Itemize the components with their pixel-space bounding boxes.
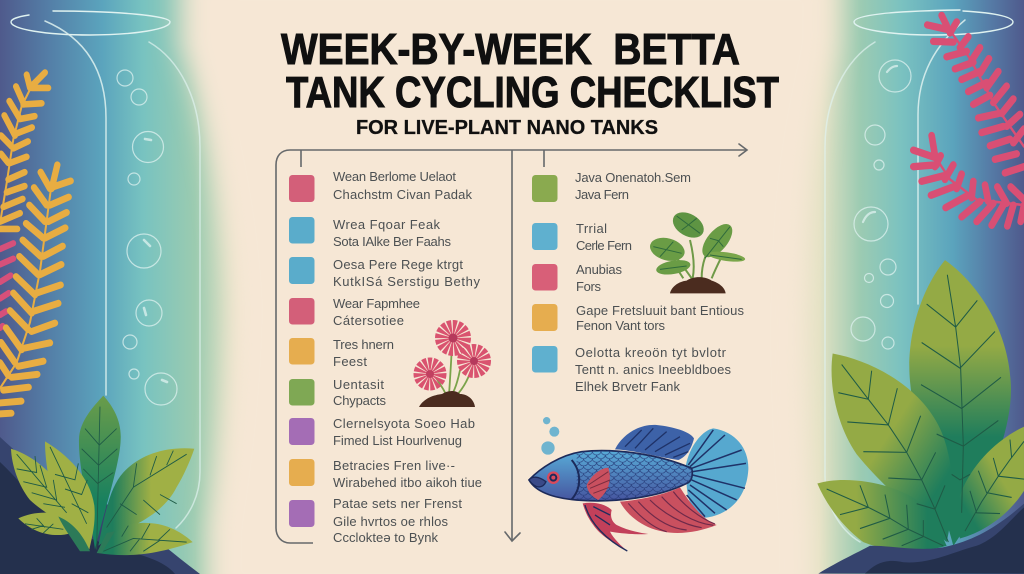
item 13: Fenon Vant tors xyxy=(576,318,666,333)
leaf veins: right plant xyxy=(827,275,1024,546)
checklist frame lines xyxy=(276,144,747,543)
leaf base: left plant xyxy=(58,516,115,553)
pectoral fin xyxy=(587,468,610,500)
right plant xyxy=(817,260,1024,574)
item 10: Java Fern xyxy=(575,187,629,202)
item 1 xyxy=(289,169,472,202)
title line 1: WEEK-BY-WEEK BETTA xyxy=(281,25,740,74)
item 8: Betracies Fren live·- xyxy=(333,458,455,473)
left seabed shadow xyxy=(0,462,175,574)
item 3 xyxy=(289,257,480,289)
body xyxy=(529,451,692,501)
left seabed xyxy=(0,437,200,574)
item 13: Gape Fretsluuit bant Entious xyxy=(576,303,744,318)
item 7 xyxy=(289,416,475,448)
item 12: Anubias xyxy=(576,262,622,277)
item 9: Patae sets ner Frenst xyxy=(333,496,462,511)
leaf: bottom left xyxy=(817,480,947,551)
left plant xyxy=(11,396,194,555)
item 13 xyxy=(532,303,744,333)
item 2: Wrea Fqoar Feak xyxy=(333,217,440,232)
item 9: Ccclokteə to Bynk xyxy=(333,530,438,545)
item 1: Wean Berlome Uelaot xyxy=(333,169,456,184)
item 3: Oesa Pere Rege ktrgt xyxy=(333,257,463,272)
right pink ferns xyxy=(913,15,1024,226)
seabed shadow: right xyxy=(865,507,1024,574)
item 14: Oelotta kreoön tyt bvlotr xyxy=(575,345,727,360)
item 5 xyxy=(289,337,394,369)
leaf: centre xyxy=(79,396,121,549)
fern: front left xyxy=(0,165,71,414)
item 9: Gile hvrtos oe rhlos xyxy=(333,514,448,529)
title xyxy=(281,25,779,139)
leaf: second left xyxy=(45,441,95,549)
item 14 xyxy=(532,345,732,394)
item 12 xyxy=(532,262,622,294)
title line 2: TANK CYCLING CHECKLIST xyxy=(286,68,779,117)
item 10: Java Onenatoh.Sem xyxy=(575,170,691,185)
item 9 xyxy=(289,496,462,545)
icon: green fern plant xyxy=(647,207,746,293)
item 6 xyxy=(289,377,386,408)
item 7: Fimed List Hourlvenug xyxy=(333,433,462,448)
item 12: Fors xyxy=(576,279,602,294)
item 6: Uentasit xyxy=(333,377,384,392)
leaf: right xyxy=(98,448,194,546)
fern: upper right xyxy=(927,15,1024,173)
item 2 xyxy=(289,217,452,249)
panel: right checklist xyxy=(532,170,744,394)
mouth xyxy=(529,477,546,487)
item 6: Chypacts xyxy=(333,393,386,408)
right glass tank xyxy=(825,10,1013,542)
item 3: KutkISá Serstigu Bethy xyxy=(333,274,480,289)
item 7: Clernelsyota Soeo Hab xyxy=(333,416,475,431)
item 11 xyxy=(532,221,632,253)
illustration: betta fish xyxy=(529,417,748,551)
left pink fern xyxy=(0,243,13,328)
seabed: right xyxy=(818,504,1024,574)
item 4: Wear Fapmhee xyxy=(333,296,420,311)
leaf veins: left plant xyxy=(17,407,187,551)
anal fin xyxy=(620,487,717,533)
item 14: Tentt n. anics Ineebldboes xyxy=(575,362,732,377)
item 4: Cátersotiee xyxy=(333,313,404,328)
bubbles: right tank xyxy=(851,60,911,349)
leaf: large left xyxy=(832,353,952,542)
subtitle: FOR LIVE-PLANT NANO TANKS xyxy=(356,117,658,139)
icon: red flower plant xyxy=(419,329,482,407)
left orange ferns xyxy=(0,73,71,414)
item 11: Trrial xyxy=(576,221,607,236)
leaf: far left xyxy=(11,449,87,546)
tail fin xyxy=(685,428,748,518)
gill xyxy=(572,460,579,499)
leaf: bottom right xyxy=(98,523,193,555)
item 5: Feest xyxy=(333,354,367,369)
left glass tank xyxy=(11,11,200,528)
item 2: Sota IAlke Ber Faahs xyxy=(333,234,452,249)
item 11: Cerle Fern xyxy=(576,238,632,253)
leaf: centre tall xyxy=(909,260,1011,546)
ventral fin xyxy=(583,503,648,551)
bubbles xyxy=(541,417,559,455)
item 8: Wirabehed itbo aikoh tiue xyxy=(333,475,482,490)
panel: left checklist xyxy=(289,169,482,545)
item 1: Chachstm Civan Padak xyxy=(333,187,472,202)
fern: upper left xyxy=(0,73,48,229)
cream centre panel xyxy=(176,0,838,574)
bubbles: left tank xyxy=(117,70,177,405)
item 10 xyxy=(532,170,691,202)
dorsal fin xyxy=(615,425,694,460)
item 5: Tres hnern xyxy=(333,337,394,352)
leaf: small left xyxy=(18,513,72,535)
item 14: Elhek Brvetr Fank xyxy=(575,379,680,394)
item 4 xyxy=(289,296,420,328)
body scales xyxy=(577,450,693,503)
item 8 xyxy=(289,458,482,490)
leaf: right xyxy=(957,427,1024,538)
fern: lower right xyxy=(913,136,1024,226)
eye xyxy=(547,471,560,484)
